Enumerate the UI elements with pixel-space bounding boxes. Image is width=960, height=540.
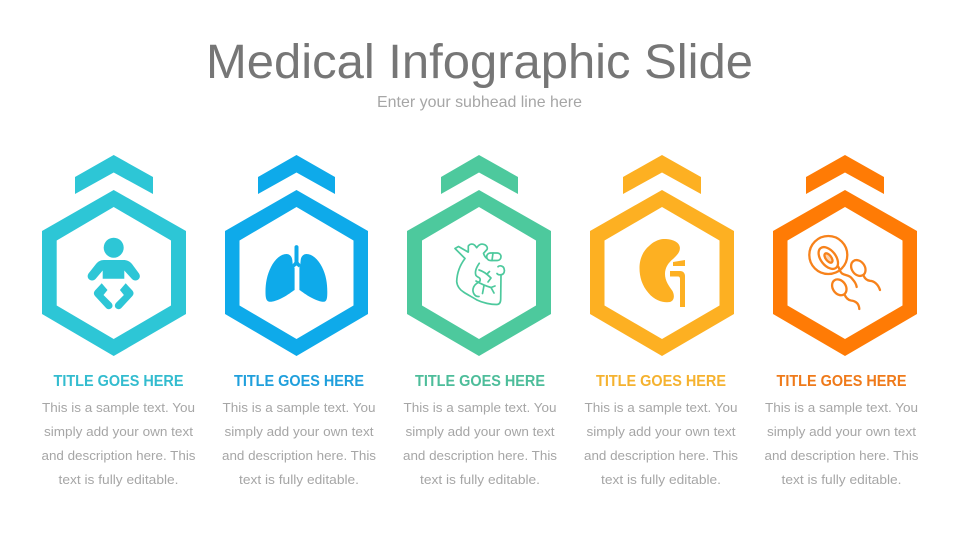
panel: sperm and egg bbox=[764, 155, 918, 487]
text: baby: and description here. This bbox=[42, 449, 196, 463]
text: lungs bbox=[222, 401, 376, 487]
text: lungs: and description here. This bbox=[222, 449, 376, 463]
icon: kidney bbox=[640, 239, 685, 307]
title: Medical Infographic Slide bbox=[206, 36, 753, 89]
text: lungs: simply add your own text bbox=[224, 425, 374, 439]
hexagon: kidney bbox=[590, 190, 734, 356]
text: sperm and egg: simply add your own text bbox=[767, 425, 917, 439]
subhead: Enter your subhead line here bbox=[377, 94, 582, 111]
hexagon: lungs bbox=[225, 190, 368, 356]
title: baby: TITLE GOES HERE bbox=[54, 373, 184, 390]
text: baby bbox=[42, 401, 196, 487]
title: heart: TITLE GOES HERE bbox=[415, 373, 545, 390]
icon: lungs bbox=[266, 245, 327, 302]
title: kidney: TITLE GOES HERE bbox=[596, 373, 726, 390]
chevron: lungs bbox=[258, 155, 335, 194]
chevron: kidney bbox=[623, 155, 701, 194]
text: kidney: text is fully editable. bbox=[601, 473, 721, 487]
title: lungs: TITLE GOES HERE bbox=[234, 373, 364, 390]
text: kidney: simply add your own text bbox=[586, 425, 736, 439]
panel: kidney bbox=[584, 155, 738, 487]
text: baby: This is a sample text. You bbox=[42, 401, 195, 415]
chevron: sperm and egg bbox=[806, 155, 884, 194]
icon: baby bbox=[88, 238, 140, 309]
icon: heart bbox=[455, 244, 504, 304]
panel: lungs bbox=[222, 155, 376, 487]
text: heart: simply add your own text bbox=[406, 425, 555, 439]
text: heart: This is a sample text. You bbox=[404, 401, 557, 415]
icon: sperm and egg bbox=[809, 236, 880, 309]
text: sperm and egg: text is fully editable. bbox=[782, 473, 902, 487]
title: sperm and egg: TITLE GOES HERE bbox=[776, 373, 906, 390]
text: heart: and description here. This bbox=[403, 449, 557, 463]
hexagon: sperm and egg bbox=[773, 190, 917, 356]
panel: heart bbox=[403, 155, 557, 487]
text: kidney bbox=[584, 401, 738, 487]
text: heart: text is fully editable. bbox=[420, 473, 540, 487]
panel: baby bbox=[42, 155, 196, 487]
chevron: heart bbox=[441, 155, 518, 194]
text: lungs: This is a sample text. You bbox=[222, 401, 376, 415]
text: sperm and egg: This is a sample text. You bbox=[765, 401, 918, 415]
text: baby: text is fully editable. bbox=[58, 473, 178, 487]
hexagon: heart bbox=[407, 190, 551, 356]
text: sperm and egg: and description here. This bbox=[764, 449, 918, 463]
text: lungs: text is fully editable. bbox=[239, 473, 359, 487]
text: kidney: This is a sample text. You bbox=[584, 401, 738, 415]
chevron: baby bbox=[75, 155, 153, 194]
text: baby: simply add your own text bbox=[44, 425, 194, 439]
text: sperm and egg bbox=[764, 401, 918, 487]
text: kidney: and description here. This bbox=[584, 449, 738, 463]
text: heart bbox=[403, 401, 557, 487]
hexagon: baby bbox=[42, 190, 186, 356]
